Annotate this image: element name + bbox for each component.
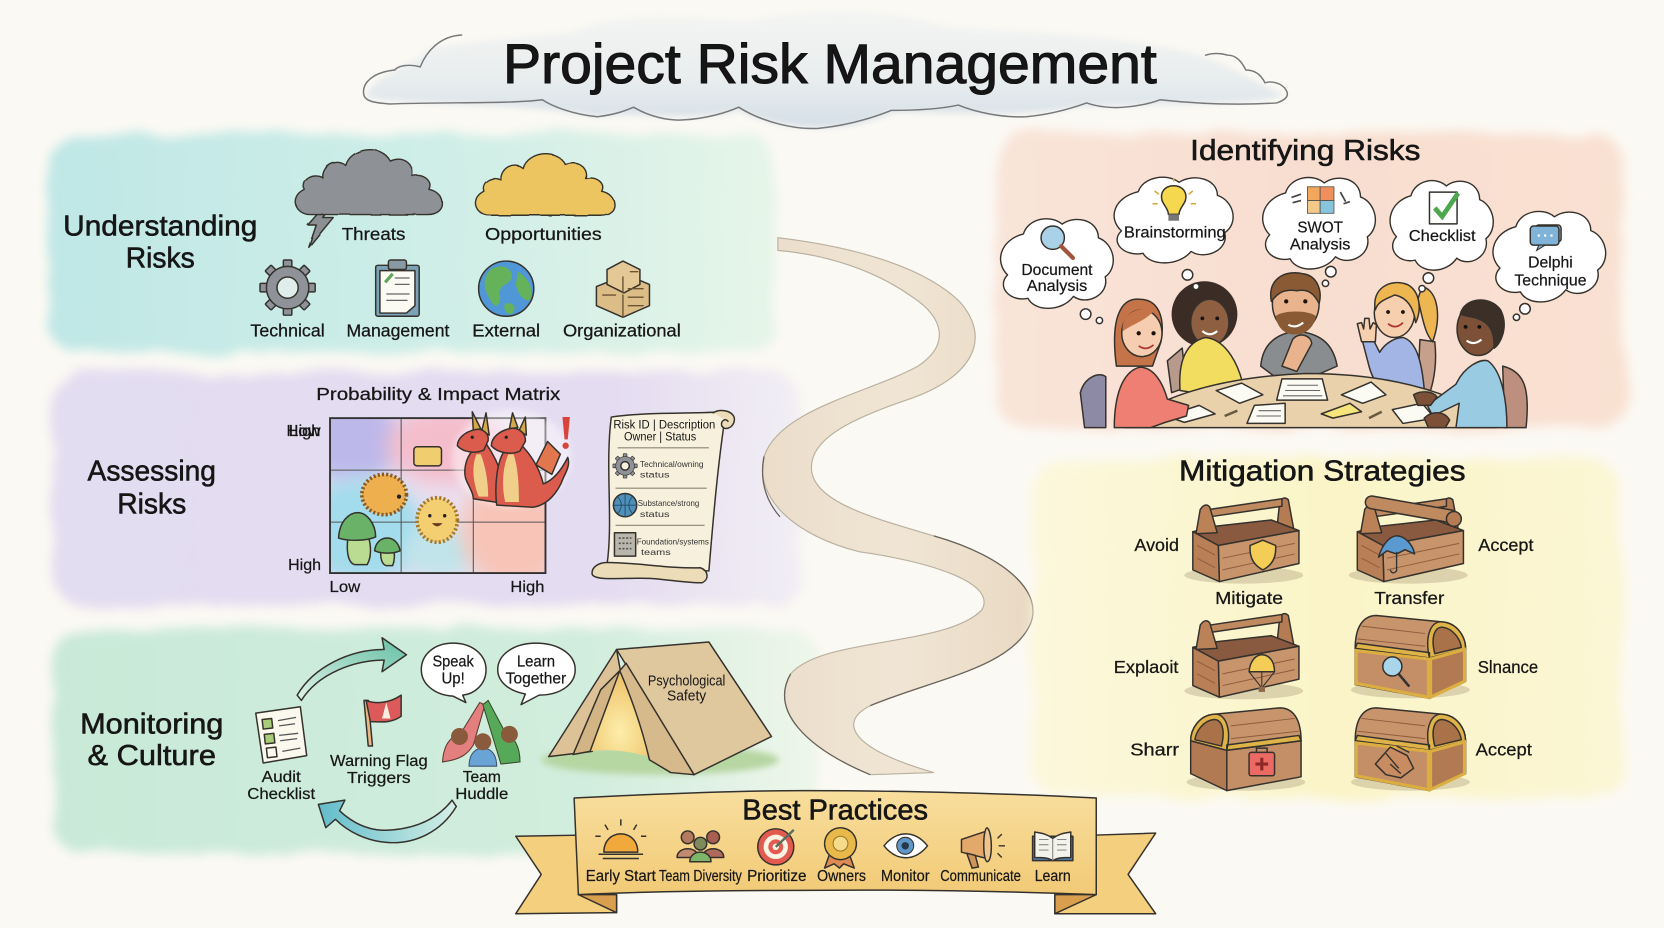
heading: Identifying Risks [1190,135,1420,167]
heading: Understanding [63,211,257,243]
label prioritize: Prioritize [747,868,807,885]
arrow: down cycle [318,800,456,843]
person: curly hair, yellow sweater [1172,281,1244,397]
icon: gold cloud [475,154,615,215]
heading: Assessing [88,456,216,488]
heading line 2: & Culture [88,740,216,772]
panel: monitoring and culture [53,628,817,853]
label threats: Threats [342,224,406,244]
thought bubble: document analysis: Analysis [1027,278,1087,295]
icon: boxes [596,261,649,317]
axis labels [287,423,544,596]
scroll header: Risk ID | Description [613,418,715,432]
panel: understanding risks [49,134,775,352]
thought bubble: brainstorming [1114,177,1233,290]
heading line 2: Risks [126,242,195,274]
label accept: Accept [1476,740,1532,760]
label slnance: Slnance [1478,657,1538,677]
table [1125,374,1496,428]
icon: megaphone [961,828,1005,868]
title: Project Risk Management [503,33,1157,95]
scroll row 2: Substance/strong [638,498,700,508]
winding road [762,238,1033,775]
cloud outline [364,35,1287,129]
label communicate: Communicate [940,868,1021,885]
label checklist: Checklist [247,786,316,803]
scroll row 3: teams [641,547,671,557]
heading: Mitigation Strategies [1179,456,1466,488]
icon: mushrooms [339,513,400,566]
icon: gear [260,260,315,315]
risk register scroll [592,410,734,583]
label huddle: Huddle [455,786,508,803]
title cloud [364,11,1287,129]
ribbon left tail [516,835,617,914]
team around table [1080,273,1527,428]
scroll row 1 [613,454,704,480]
papers on table [1166,379,1435,423]
axis labels: Low [289,423,321,440]
scroll bottom roll [592,562,707,583]
thought bubble: brainstorming: Brainstorming [1124,225,1226,242]
label owners: Owners [817,868,866,885]
label mitigate: Mitigate [1215,588,1283,608]
scroll row 3: Foundation/systems [637,536,709,546]
label accept: Accept [1478,535,1534,555]
speech bubble: learn together: Learn [517,653,555,670]
ribbon main [574,791,1096,895]
panel wash [1032,458,1622,798]
icon: hedgehogs [362,474,457,542]
speech bubble: speak up: Up! [441,670,465,687]
banner heading: Best Practices [742,794,928,826]
road surface [762,238,1033,775]
scroll row 1: Technical/owning [640,459,704,469]
thought bubble: document analysis: Document [1021,262,1093,279]
axis labels: High [288,557,321,574]
label transfer: Transfer [1374,588,1445,608]
scroll paper [607,412,726,571]
panel wash [49,134,775,352]
cloud wash [366,11,1284,127]
matrix chart [329,417,546,574]
panel: identifying risks [995,134,1624,429]
thought bubble: swot analysis: SWOT [1297,219,1343,236]
label management: Management [346,320,450,340]
label team diversity: Team Diversity [659,868,742,885]
icon: tent: Psychological [648,674,725,690]
panel wash [995,134,1624,429]
speech bubble: learn together [498,643,575,705]
axis labels: High [287,423,320,440]
scroll row 2: status [640,509,670,519]
scroll row 3 [614,533,709,557]
matrix colour field [331,419,544,572]
axis labels: High [510,579,544,596]
icon: audit checklist [256,707,307,763]
person: beard, grey shirt [1261,273,1337,376]
icon: eye [884,834,928,858]
icon: tent: Safety [667,688,707,704]
icon: target [758,829,794,865]
thought bubble: swot analysis: Analysis [1290,236,1350,253]
label triggers: Triggers [347,770,411,787]
thought bubble: delphi technique: Technique [1514,272,1587,289]
label explaoit: Explaoit [1114,657,1179,677]
arrow: up cycle [297,638,406,700]
thought bubble: document analysis [1001,219,1113,324]
icon: open book [1033,832,1073,861]
ribbon folds [578,895,1096,914]
label warning flag: Warning Flag [330,753,428,770]
label external: External [472,320,540,340]
icon: storm cloud [295,150,442,247]
panel: mitigation strategies [1032,456,1622,798]
thought bubble: checklist: Checklist [1409,228,1476,245]
toolbox: umbrella [1349,495,1468,584]
banner: best practices [516,791,1156,914]
label monitor: Monitor [881,868,930,885]
scroll subheader: Owner | Status [624,429,696,443]
label early start: Early Start [586,868,656,885]
icon: clipboard [376,260,419,316]
ribbon right tail [1055,833,1156,914]
axis labels: Low [330,579,361,596]
toolbox: parachute [1184,614,1303,699]
icon: team huddle [443,700,520,766]
chairs [1080,375,1106,428]
icon: team diversity [677,831,724,862]
icon: sunrise [595,819,646,859]
thought bubble: checklist [1390,181,1493,292]
icon: exclamation mark [562,417,570,449]
icon: gold tile [414,447,441,466]
label audit: Audit [262,769,301,786]
heading line 2: Risks [117,489,186,521]
person: blonde, blue shirt [1357,283,1438,395]
chest: magnifier [1351,616,1470,698]
label avoid: Avoid [1134,535,1179,555]
person: short hair, light blue shirt [1414,300,1507,428]
label organizational: Organizational [563,320,681,340]
thought bubble: delphi technique: Delphi [1528,254,1573,271]
speech bubble: learn together: Together [506,670,567,687]
icon: dragons [452,410,571,507]
label sharr: Sharr [1130,740,1179,760]
label technical: Technical [250,320,325,340]
thought bubble: delphi technique [1493,211,1606,320]
panel wash [53,628,817,853]
label team: Team [463,769,501,786]
heading: Monitoring [80,708,223,740]
label opportunities: Opportunities [485,224,602,244]
toolbox: shield [1184,498,1303,584]
icon: globe [479,261,534,316]
icon: tent [541,642,779,775]
chest: medkit [1186,708,1305,791]
speech bubble: speak up: Speak [432,653,474,670]
chest: handshake [1351,708,1470,791]
panel: assessing risks [53,371,800,605]
road dark edges [763,456,1033,775]
label learn: Learn [1035,868,1071,885]
person: red hair, coral shirt [1114,299,1189,428]
icon: warning flag [364,695,401,746]
icon: medal [825,828,856,868]
panel wash [53,371,800,605]
matrix title: Probability & Impact Matrix [316,384,561,404]
speech bubble: speak up [421,643,486,703]
scroll row 2 [613,493,700,519]
thought bubble: swot analysis [1263,178,1375,287]
scroll row 1: status [640,470,670,480]
scroll top roll [713,410,734,428]
